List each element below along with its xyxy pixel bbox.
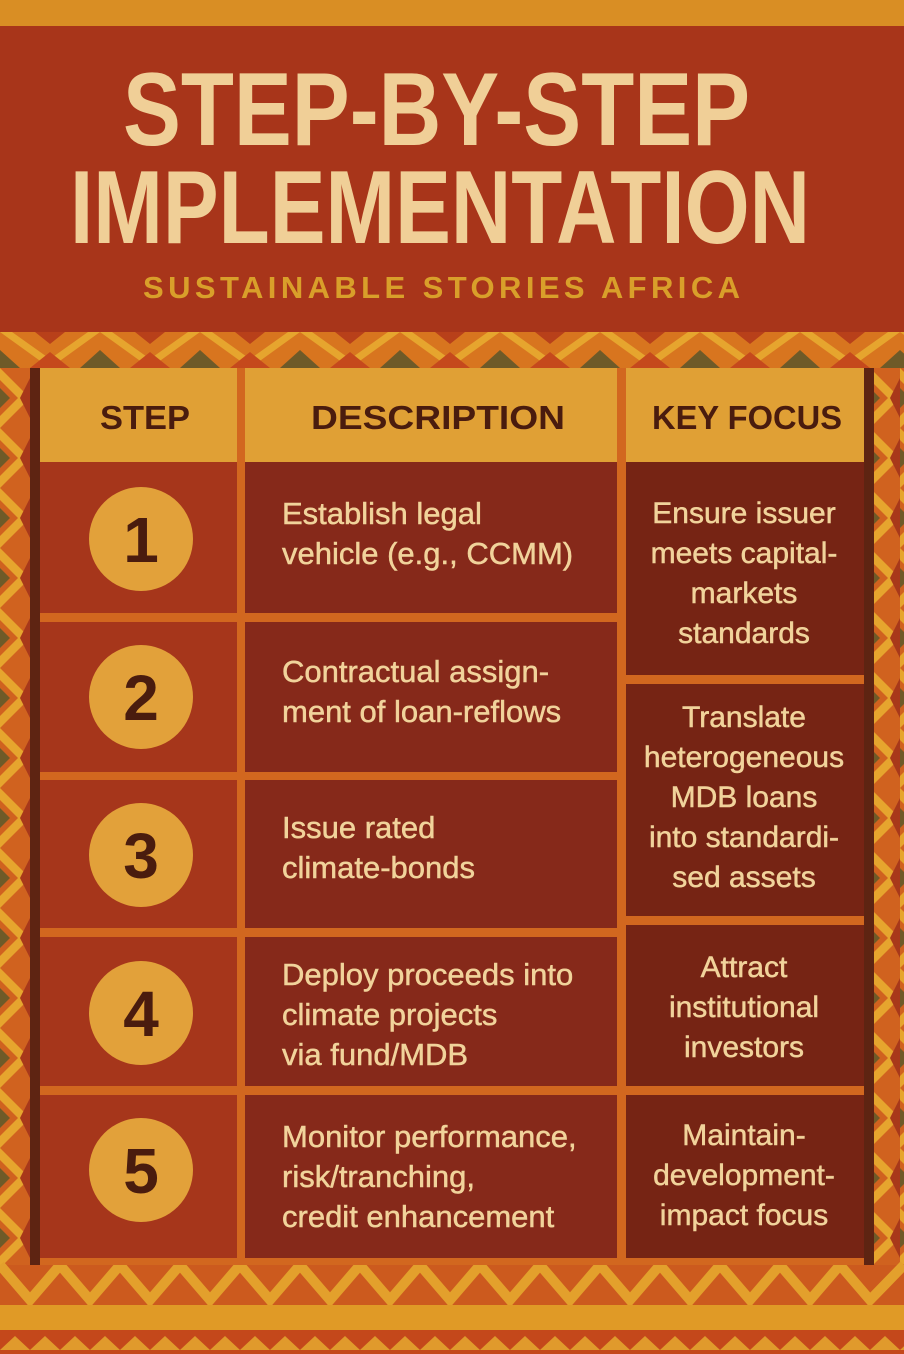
key focus column <box>626 462 864 1258</box>
table: Monitor performance, <box>282 1119 577 1154</box>
table: ment of loan-reflows <box>282 694 561 729</box>
table: heterogeneous <box>644 741 844 774</box>
table: into standardi- <box>649 821 839 854</box>
side borders <box>0 368 30 1265</box>
table: vehicle (e.g., CCMM) <box>282 536 573 571</box>
table: climate-bonds <box>282 850 475 885</box>
title: STEP-BY-STEP <box>123 52 750 168</box>
table: Deploy proceeds into <box>282 957 573 992</box>
table: investors <box>684 1031 804 1064</box>
table: Establish legal <box>282 496 482 531</box>
table: standards <box>678 617 810 650</box>
description column <box>245 462 617 1258</box>
table: Contractual assign- <box>282 654 549 689</box>
table: MDB loans <box>671 781 817 814</box>
table <box>30 368 874 1265</box>
table: Ensure issuer <box>652 497 836 530</box>
bottom patterns <box>0 1265 904 1354</box>
table: meets capital- <box>651 537 837 570</box>
pattern band top <box>0 332 904 368</box>
table: markets <box>691 577 797 610</box>
title banner <box>0 26 904 332</box>
header row <box>40 368 864 462</box>
table: risk/tranching, <box>282 1159 475 1194</box>
table: Maintain- <box>682 1119 806 1152</box>
step column: 1 <box>123 504 159 576</box>
step column: 2 <box>123 662 159 734</box>
title <box>70 52 810 266</box>
step column: 5 <box>123 1135 159 1207</box>
table: development- <box>653 1159 835 1192</box>
step column: 3 <box>123 820 159 892</box>
table: via fund/MDB <box>282 1037 468 1072</box>
step column <box>40 462 237 1258</box>
subtitle: SUSTAINABLE STORIES AFRICA <box>143 270 740 305</box>
table: credit enhancement <box>282 1199 555 1234</box>
header row: STEP <box>100 399 190 436</box>
header row: DESCRIPTION <box>311 399 565 436</box>
header row: KEY FOCUS <box>652 399 842 436</box>
table: sed assets <box>672 861 816 894</box>
table: Translate <box>682 701 806 734</box>
table: institutional <box>669 991 819 1024</box>
table: climate projects <box>282 997 497 1032</box>
step column: 4 <box>123 978 159 1050</box>
table: impact focus <box>660 1199 828 1232</box>
table: Issue rated <box>282 810 435 845</box>
table: Attract <box>701 951 788 984</box>
top band <box>0 0 904 26</box>
